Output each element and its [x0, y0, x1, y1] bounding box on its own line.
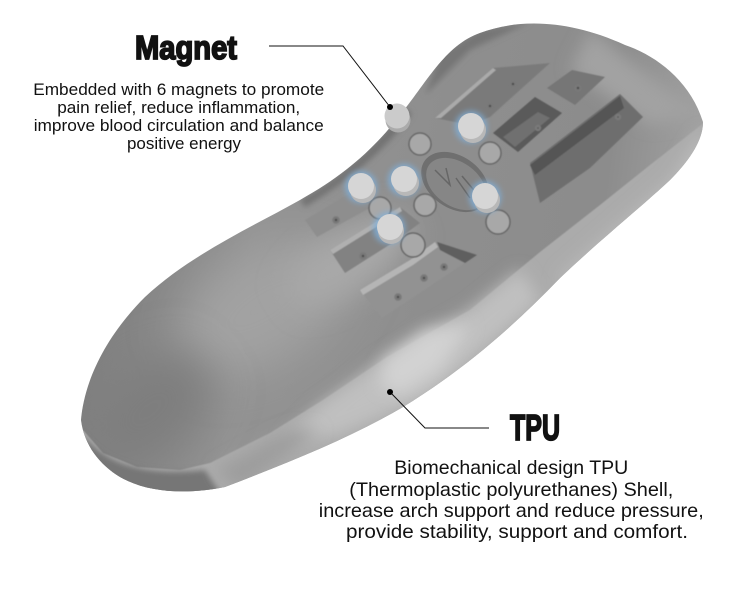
leader line: TPU [387, 389, 489, 428]
pockets [305, 63, 643, 318]
screws [334, 82, 620, 300]
text block: TPU description: provide stability, support and comfort. [346, 521, 688, 543]
text block: magnet description: positive energy [127, 135, 242, 153]
text block: TPU description: (Thermoplastic polyurethanes) Shell, [349, 479, 673, 501]
magnets with blue glow [345, 111, 501, 244]
text block: magnet description: improve blood circulation and balance [34, 117, 324, 135]
lifted magnet [384, 104, 410, 132]
infographic canvas [34, 24, 703, 542]
empty magnet holes [369, 133, 510, 257]
raised side wall [82, 122, 730, 510]
text block: magnet description: Embedded with 6 magnets to promote [33, 81, 324, 99]
heading: Magnet: Magnet [135, 29, 237, 66]
insole shell [67, 22, 730, 510]
surface shading [67, 22, 700, 489]
text block: magnet description: pain relief, reduce inflammation, [57, 99, 300, 117]
leader line: magnet [269, 46, 393, 110]
text block: TPU description: Biomechanical design TPU [394, 457, 628, 479]
heading: TPU: TPU [510, 407, 560, 448]
centre logo oval [410, 139, 500, 225]
text block: TPU description: increase arch support and reduce pressure, [319, 500, 704, 522]
